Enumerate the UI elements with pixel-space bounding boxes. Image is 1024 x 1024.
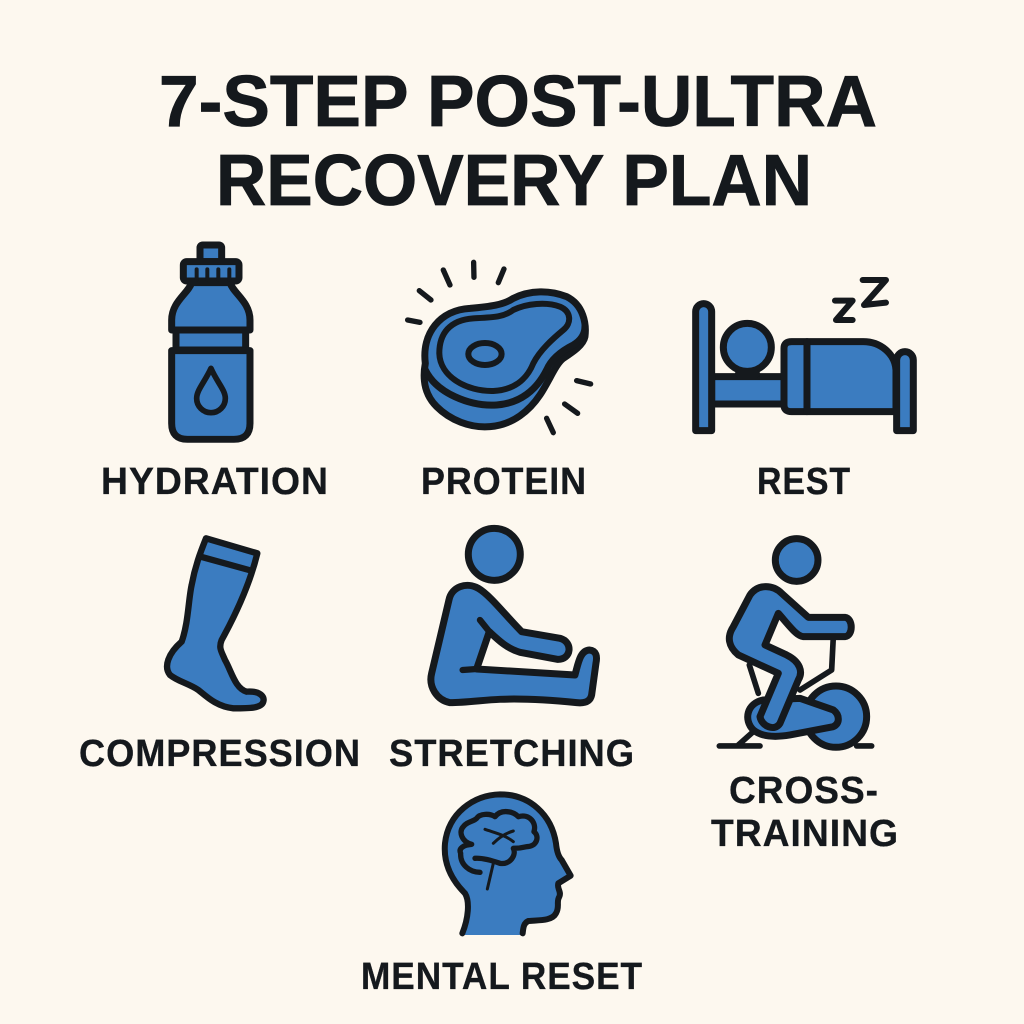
icon: water bottle [172, 245, 250, 439]
title: RECOVERY PLAN [216, 141, 812, 221]
label: hydration: HYDRATION [101, 461, 329, 503]
icon: bed with sleeper [696, 280, 913, 431]
label: mental reset: MENTAL RESET [361, 956, 643, 998]
label: stretching: STRETCHING [389, 733, 635, 775]
icon: steak [408, 262, 591, 433]
label: cross-training: TRAINING [711, 813, 899, 855]
title [159, 62, 877, 221]
label: cross-training [711, 770, 899, 855]
icon: exercise bike rider [719, 539, 872, 747]
label: protein: PROTEIN [421, 461, 587, 503]
icon: head with brain [445, 794, 571, 935]
label: rest: REST [757, 461, 851, 503]
icon: stretching figure [431, 528, 597, 703]
title: 7-STEP POST-ULTRA [159, 62, 877, 142]
label: cross-training: CROSS- [729, 770, 879, 812]
label: compression: COMPRESSION [79, 733, 361, 775]
icon: compression sock [167, 538, 264, 708]
